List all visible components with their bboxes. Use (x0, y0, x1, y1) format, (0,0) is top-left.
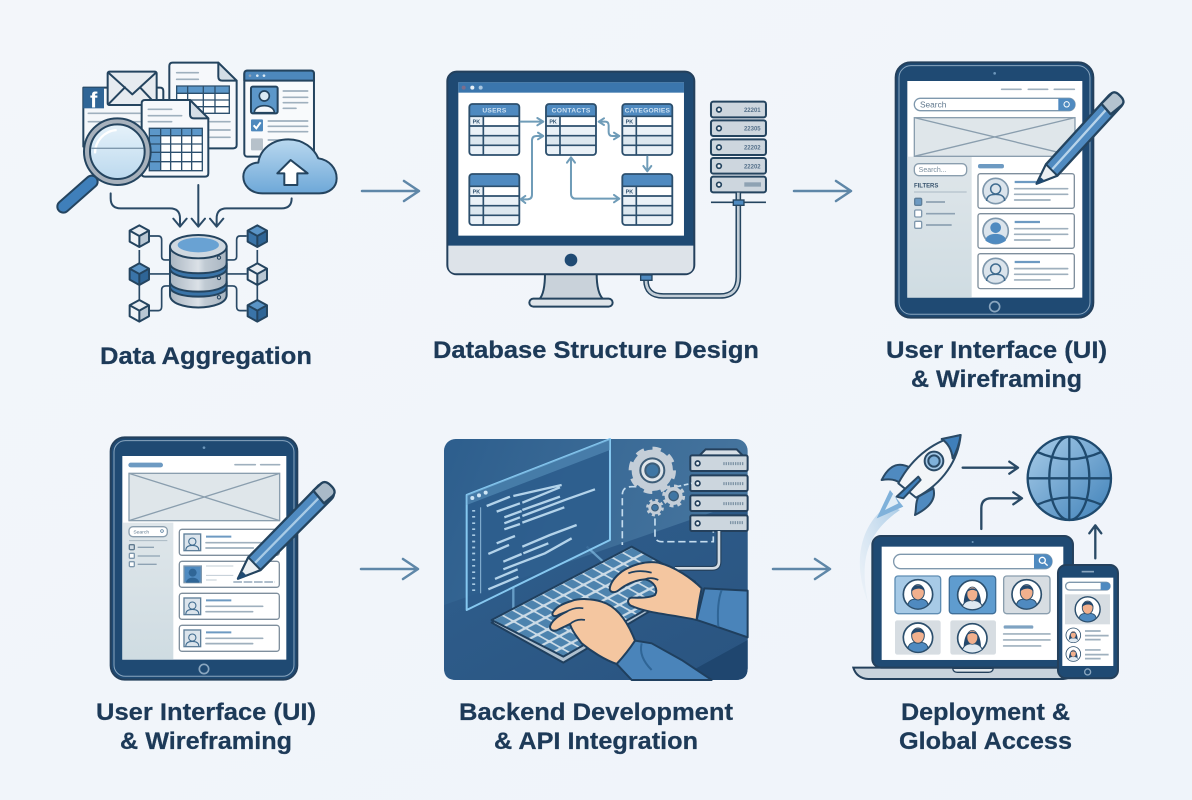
icon: left hand and sleeve (550, 599, 712, 680)
label: user interface and wireframing, bottom: & Wireframing (120, 728, 292, 755)
icon: browser profile card (244, 71, 314, 157)
icon: server stack (690, 449, 748, 531)
sidebar search and filters (914, 164, 967, 228)
cable (641, 193, 766, 296)
arrow: rocket to globe (963, 462, 1018, 474)
result card 3 (978, 254, 1074, 289)
table: categories (622, 104, 672, 155)
icon: database cylinder (170, 235, 227, 307)
label: deployment and global access: Deployment & (901, 699, 1070, 726)
icon: server stack: 22201 (744, 108, 761, 114)
label: deployment and global access: Global Access (899, 728, 1072, 755)
panel: backend development illustration (444, 439, 748, 680)
arrow: phone to globe (1089, 525, 1101, 558)
icon: keyboard (492, 547, 695, 663)
result card 2 (978, 214, 1074, 248)
table: contacts: PK (549, 120, 557, 126)
data flow arrows (111, 185, 292, 227)
arrow: laptop to globe (981, 492, 1022, 529)
holographic code screen (467, 439, 610, 610)
sidebar search and filters: Search (133, 529, 149, 535)
panel: database structure illustration (447, 72, 766, 307)
icon: phone (1058, 565, 1118, 678)
table: users: PK (473, 120, 480, 126)
icon: envelope (108, 72, 157, 105)
panel: wireframe tablet (896, 62, 1123, 318)
result card 1 (179, 529, 279, 555)
table: contacts: CONTACTS (552, 107, 591, 114)
table: lower left: PK (473, 190, 480, 196)
icon: monitor (447, 72, 694, 274)
label: data aggregation: Data Aggregation (100, 343, 312, 370)
icon: pencil (238, 482, 335, 579)
icon: laptop (853, 536, 1073, 679)
icon: server stack: 22202 (744, 146, 761, 152)
rocket trail (860, 505, 900, 603)
label: user interface and wireframing, top (886, 337, 1107, 393)
label: backend development and api integration: & API Integration (494, 728, 698, 755)
table: lower right: PK (626, 190, 633, 196)
arrow 1 (362, 181, 419, 201)
label: user interface and wireframing, bottom: User Interface (UI) (96, 699, 316, 726)
icon: spreadsheet document front (142, 100, 208, 177)
icon: node cubes (130, 225, 267, 322)
profile grid (895, 576, 1050, 655)
icon: cloud upload (243, 139, 337, 193)
table: users (469, 104, 519, 155)
result card 1 (978, 174, 1074, 208)
image placeholder (914, 118, 1075, 156)
icon: tablet body (896, 62, 1093, 318)
result card 2 (179, 561, 279, 587)
laptop search bar (894, 554, 1052, 569)
icon: server stack: 22305 (744, 127, 761, 133)
result card 3 (179, 593, 279, 619)
image placeholder (129, 473, 280, 521)
icon: monitor stand (529, 273, 613, 307)
table: lower right (622, 174, 672, 225)
label: database structure design: Database Structure Design (433, 337, 759, 364)
icon: social profile document: f (90, 87, 98, 112)
icon: gears (632, 450, 683, 515)
arrow 4 (773, 559, 830, 579)
connector lines (139, 236, 257, 311)
table: users: USERS (482, 107, 507, 114)
arrow 2 (794, 181, 851, 201)
icon: social profile document (83, 87, 163, 147)
panel background (444, 439, 748, 680)
label: user interface and wireframing, top: & Wireframing (911, 366, 1082, 393)
sidebar search and filters (129, 527, 167, 567)
table: contacts (546, 104, 596, 155)
icon: server stack: 22202 (744, 164, 761, 170)
sidebar search and filters: Search... (919, 167, 947, 174)
label: deployment and global access (899, 699, 1072, 755)
wireframe header lines (1002, 87, 1074, 92)
result card 4 (179, 625, 279, 651)
table: categories: CATEGORIES (625, 107, 671, 114)
connectors (622, 483, 719, 568)
icon: right hand and sleeve (610, 562, 748, 637)
sidebar search and filters: FILTERS (914, 184, 938, 190)
panel: wireframe tablet lower (111, 437, 335, 680)
label: user interface and wireframing, bottom (96, 699, 316, 755)
search bar: Search (920, 100, 947, 110)
label: user interface and wireframing, top: User Interface (UI) (886, 337, 1107, 364)
icon: server stack (711, 102, 766, 192)
panel: deployment illustration (853, 435, 1118, 679)
relationship arrows (521, 118, 651, 203)
icon: spreadsheet document back (169, 63, 237, 148)
icon: globe (1028, 437, 1111, 520)
icon: magnifying glass (63, 118, 151, 207)
arrow 3 (361, 559, 418, 579)
label: backend development and api integration: Backend Development (459, 699, 733, 726)
icon: rocket (877, 435, 961, 518)
icon: tablet body (111, 437, 297, 680)
table: categories: PK (626, 120, 633, 126)
panel: data aggregation illustration (63, 63, 337, 322)
label: backend development and api integration (459, 699, 733, 755)
header bars (128, 463, 280, 467)
icon: pencil (1037, 92, 1123, 184)
table: lower left (469, 174, 519, 225)
search bar (914, 98, 1075, 111)
list heading bar (978, 164, 1004, 168)
